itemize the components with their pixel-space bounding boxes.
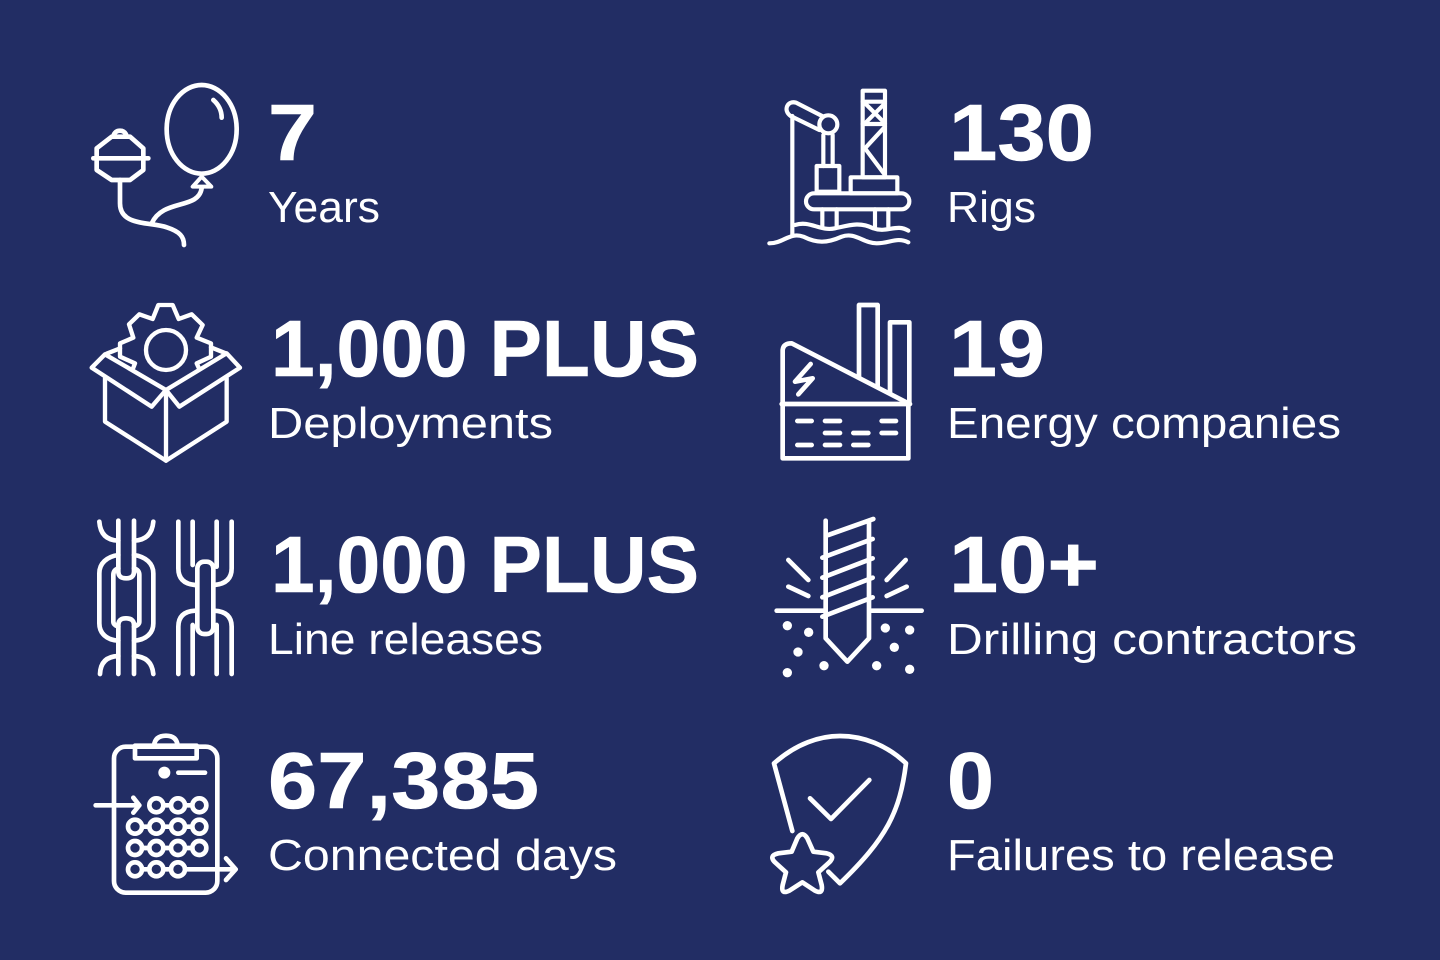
label: Drilling contractors: Drilling contractors [947, 615, 1357, 664]
number: 1,000 PLUS: 1,000 PLUS [271, 304, 699, 393]
icon: clipboard with abacus [96, 736, 236, 893]
label: Failures to release: Failures to release [947, 831, 1335, 880]
icon: shield with check and star [772, 736, 906, 892]
icon: buoy and balloon [93, 85, 237, 245]
label: Connected days: Connected days [268, 831, 617, 880]
icon: broken chain [99, 521, 232, 674]
label: Line releases: Line releases [268, 615, 543, 664]
stat: 19 energy companies [782, 304, 1341, 458]
stat: 7 years [93, 85, 380, 245]
stat: 67,385 connected days [96, 736, 617, 893]
icon: drill bit [777, 519, 922, 677]
label: Rigs: Rigs [947, 183, 1036, 232]
stat: 0 failures to release [772, 736, 1335, 892]
stat: 1,000 plus line releases [99, 520, 699, 674]
number: 130: 130 [949, 88, 1094, 177]
number: 1,000 PLUS: 1,000 PLUS [271, 520, 699, 609]
icon: offshore rig [769, 91, 909, 243]
label: Deployments: Deployments [268, 399, 553, 448]
icon: factory [782, 305, 910, 458]
label: Energy companies: Energy companies [947, 399, 1341, 448]
number: 19: 19 [949, 304, 1045, 393]
number: 67,385: 67,385 [268, 736, 539, 825]
stat: 1,000 plus deployments [92, 304, 699, 461]
label: Years: Years [268, 183, 380, 232]
icon: box with gear [92, 305, 240, 461]
stat: 130 rigs [769, 88, 1094, 243]
number: 10+: 10+ [949, 520, 1099, 609]
stat: 10+ drilling contractors [777, 519, 1357, 677]
number: 0: 0 [947, 736, 994, 825]
number: 7: 7 [268, 88, 317, 177]
